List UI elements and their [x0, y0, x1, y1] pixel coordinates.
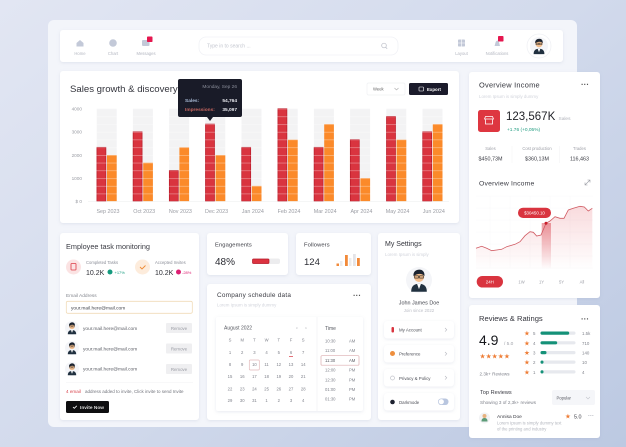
time picker: 01:00: [325, 387, 336, 392]
search box: [199, 37, 398, 55]
rating bars: 1.5k: [582, 331, 591, 336]
background panel: [48, 20, 577, 427]
calendar: W: [265, 338, 269, 342]
calendar: F: [290, 338, 293, 342]
stat: completed tasks: Completed Tasks: [86, 260, 118, 265]
time picker: 11:00: [325, 348, 336, 353]
panel: sales growth chart: [60, 71, 459, 223]
invite row 3: your.mail.here@mail.com: [83, 366, 137, 372]
stat: accepted invites: [135, 260, 192, 277]
invite row 1: your.mail.here@mail.com: [83, 326, 137, 332]
invite row 1: Remove: [171, 326, 188, 331]
panel: followers: Followers: [304, 242, 330, 248]
rating bars: [524, 330, 591, 376]
y axis labels: 3000: [72, 130, 82, 135]
x axis labels: Feb 2024: [278, 209, 300, 215]
top reviews heading: [480, 390, 537, 405]
rating bars: 710: [582, 341, 590, 346]
calendar: 4: [302, 398, 305, 403]
range tabs: 1W: [518, 280, 525, 284]
heading: Company schedule data: [217, 292, 291, 299]
tooltip: Sales:: [185, 98, 200, 104]
panel: reviews and ratings: 2.3k+ Reviews: [480, 372, 510, 376]
calendar: 2: [278, 398, 281, 403]
nav item: chart: [108, 39, 119, 56]
rating bars: 140: [582, 350, 590, 356]
time picker: 11:30: [325, 358, 336, 363]
email field: Email Address: [66, 293, 97, 299]
calendar: 30: [240, 398, 245, 403]
time picker: AM: [349, 338, 356, 343]
rating bars: 4: [533, 341, 536, 346]
panel: company schedule: Lorem Ipsum is simply dummy: [217, 302, 277, 308]
calendar: 29: [228, 398, 233, 403]
stat: completed tasks: +17%: [114, 270, 125, 275]
tooltip: [178, 79, 242, 121]
progress bar: [252, 258, 280, 264]
icon: store: [478, 110, 500, 132]
x axis labels: May 2024: [386, 209, 409, 215]
y axis labels: 4000: [72, 106, 82, 112]
calendar: 2: [241, 350, 244, 355]
export button: [409, 83, 448, 95]
time picker: AM: [349, 358, 356, 363]
time picker: PM: [349, 397, 356, 402]
nav item: chart: Chart: [108, 51, 119, 56]
calendar: 3: [253, 350, 256, 355]
x axis labels: [96, 209, 445, 215]
calendar: 7: [302, 350, 305, 355]
icon: expand: [585, 180, 590, 185]
heading: Employee task monitoring: [66, 242, 150, 251]
calendar: 20: [289, 374, 294, 379]
invite note: 4 email: [66, 389, 81, 394]
calendar: 18: [264, 374, 270, 379]
menu: preference: Preference: [399, 352, 421, 356]
followers value: 124: [304, 257, 320, 268]
review entry: ···: [588, 414, 594, 420]
calendar: M: [240, 338, 244, 342]
search box: Type in to search ...: [207, 44, 251, 50]
menu: privacy: Privacy & Policy: [399, 376, 431, 381]
rating bars: 10: [582, 360, 587, 365]
calendar: 17: [252, 374, 257, 379]
calendar: 23: [240, 386, 245, 391]
invite row 3: Remove: [171, 367, 188, 372]
rating bars: 5: [533, 331, 536, 336]
x axis labels: Oct 2023: [133, 209, 155, 215]
time picker: 01:30: [325, 397, 336, 402]
bar chart: [88, 109, 450, 202]
calendar: S: [229, 338, 232, 342]
menu dots: ···: [353, 291, 361, 300]
x axis labels: Dec 2023: [205, 209, 228, 215]
nav item: home: Home: [74, 51, 86, 56]
top reviews heading: Showing 3 of 2,3k+ reviews: [480, 400, 537, 405]
calendar: August 2022: [224, 326, 252, 332]
nav item: messages: [136, 36, 156, 56]
time picker: PM: [349, 377, 356, 382]
invite button: [66, 401, 109, 413]
top navigation bar: [60, 30, 563, 62]
calendar: 3: [290, 398, 293, 403]
calendar: 12: [276, 362, 282, 367]
rating bars: ★: [524, 339, 530, 347]
line chart: [476, 196, 593, 270]
export button: Export: [427, 87, 441, 92]
nav item: layout: [455, 40, 469, 56]
stats row: 116,463: [570, 156, 589, 162]
review entry: Lorem Ipsum is simply dummy text: [497, 420, 562, 426]
calendar: 24: [252, 386, 257, 391]
subheading: Overview Income: [479, 180, 535, 188]
time picker: PM: [349, 368, 356, 372]
calendar: T: [253, 338, 256, 342]
review entry: [479, 412, 594, 432]
time picker: 12:00: [325, 368, 336, 372]
calendar: 10: [252, 362, 257, 367]
value pill: [518, 208, 551, 218]
tooltip: Impressions:: [185, 107, 215, 113]
nav item: layout: Layout: [455, 51, 469, 56]
stat: completed tasks: [66, 260, 125, 277]
week dropdown: Week: [373, 86, 385, 92]
stat: completed tasks: 10.2K: [86, 270, 105, 277]
calendar: 28: [301, 386, 306, 391]
stats row: Sales: [485, 146, 496, 151]
rating bars: 1: [533, 370, 536, 375]
range tabs: All: [580, 280, 584, 284]
x axis labels: Jun 2024: [423, 209, 445, 215]
heading: My Settings: [385, 241, 422, 248]
nav item: messages: Messages: [136, 51, 156, 56]
x axis labels: Apr 2024: [350, 209, 372, 215]
tooltip: 35,097: [222, 107, 237, 113]
panel: company schedule: [207, 284, 371, 420]
calendar: 26: [276, 386, 282, 391]
chart title: Sales growth & discovery: [70, 84, 178, 95]
rating bars: 4: [582, 370, 585, 375]
profile avatar: [406, 267, 432, 293]
star row: ★★★★★: [480, 352, 510, 360]
calendar: [216, 317, 363, 411]
y axis labels: 2000: [72, 153, 82, 158]
heading: Reviews & Ratings: [479, 314, 543, 323]
stats row: Cost production: [522, 146, 552, 151]
menu: privacy: [384, 369, 454, 386]
x axis labels: Nov 2023: [169, 209, 192, 215]
panel: my settings: [378, 233, 460, 420]
calendar: S: [302, 338, 305, 342]
rating score: 4.9: [479, 332, 499, 348]
rating score: [479, 332, 514, 348]
x axis labels: Sep 2023: [96, 209, 120, 215]
income figure: [506, 111, 571, 133]
calendar: 1: [265, 398, 268, 403]
review entry: Annisa Doe: [497, 414, 522, 420]
review entry: of the printing and industry: [497, 426, 547, 432]
range tabs: 1Y: [539, 280, 544, 284]
email field: [66, 293, 192, 313]
calendar: 22: [228, 386, 233, 391]
calendar: 21: [301, 374, 306, 379]
income figure: Sales: [558, 116, 571, 122]
calendar: 14: [301, 362, 306, 367]
invite row 2: [65, 341, 192, 355]
calendar: ‹: [296, 326, 298, 330]
week dropdown: [367, 83, 405, 95]
tooltip: 54,764: [222, 98, 237, 104]
calendar: 4: [265, 350, 268, 355]
stats row: $360,13M: [525, 156, 549, 162]
y axis labels: [72, 106, 82, 204]
panel: my settings: Lorem Ipsum is simply: [385, 252, 429, 257]
invite row 2: Remove: [171, 346, 188, 352]
time picker: AM: [349, 348, 356, 353]
stat: accepted invites: -28%: [182, 270, 192, 275]
calendar: 1: [229, 350, 232, 355]
rating bars: ★: [524, 368, 530, 376]
calendar: T: [278, 338, 281, 342]
time picker: 10:30: [325, 338, 336, 343]
user avatar: [527, 34, 551, 58]
menu: my account: [384, 321, 454, 338]
y axis labels: $ 0: [75, 199, 82, 204]
calendar: 16: [240, 374, 245, 379]
calendar: 11: [264, 362, 269, 367]
value pill: $30450.10: [524, 211, 545, 216]
nav item: notifications: [486, 36, 508, 56]
panel: reviews and ratings: ···: [581, 314, 589, 324]
menu: my account: My Account: [399, 328, 422, 332]
panel: followers: [296, 233, 371, 275]
review entry: ★: [565, 412, 571, 420]
income figure: +1.76 (+0,05%): [507, 127, 540, 133]
invite note: address added to invite, Click invite to send Invite: [85, 389, 184, 394]
stat: accepted invites: Accepted Invites: [155, 260, 186, 265]
time picker: [321, 326, 359, 402]
stat: accepted invites: 10.2K: [155, 270, 174, 277]
calendar: 6: [290, 350, 293, 355]
stats row: Trades: [573, 146, 586, 151]
rating bars: ★: [524, 349, 530, 357]
calendar: 19: [276, 374, 282, 379]
tooltip: Monday, Sep 26: [202, 84, 237, 90]
top reviews heading: Top Reviews: [480, 390, 512, 396]
calendar: 27: [289, 386, 294, 391]
menu: darkmode toggle: Darkmode: [399, 400, 420, 405]
menu: preference: [384, 345, 454, 362]
x axis labels: Mar 2024: [314, 209, 337, 215]
panel: overview income: Lorem Ipsum is simply dummy: [479, 94, 539, 99]
income figure: 123,567K: [506, 111, 556, 123]
profile name: John James Doe: [399, 300, 439, 306]
calendar: 9: [241, 362, 244, 367]
engagement value: 48%: [215, 257, 235, 268]
time picker: Time: [325, 326, 336, 332]
stats row: $450,73M: [479, 156, 503, 162]
rating bars: ★: [524, 358, 530, 366]
nav item: home: [74, 40, 86, 56]
range tabs: [477, 276, 584, 288]
calendar: 8: [229, 362, 232, 367]
calendar: 5: [278, 350, 281, 355]
rating bars: 2: [533, 360, 536, 365]
invite button: Invite Now: [80, 405, 104, 411]
calendar: ›: [305, 326, 307, 330]
time picker: PM: [349, 387, 356, 392]
panel: engagements: Engagements: [215, 242, 252, 248]
rating score: / 5.0: [504, 341, 514, 347]
rating bars: ★: [524, 330, 530, 338]
time picker: 12:30: [325, 377, 336, 382]
panel: my settings: Join since 2022: [404, 308, 435, 313]
calendar: 15: [228, 374, 233, 379]
y axis labels: 1000: [72, 176, 82, 181]
email field: your.mail.here@mail.com: [71, 306, 125, 312]
panel: overview income: [469, 72, 600, 298]
stats row: [479, 146, 589, 163]
panel: reviews and ratings: [469, 305, 600, 438]
x axis labels: Jan 2024: [242, 209, 264, 215]
popular dropdown: Popular: [556, 396, 572, 400]
range tabs: 5Y: [559, 280, 564, 284]
panel: engagements: [207, 233, 288, 275]
calendar: 25: [264, 386, 270, 391]
heading: Overview Income: [479, 80, 540, 90]
range tabs: 24H: [486, 280, 494, 284]
panel: employee task monitoring: [60, 233, 199, 420]
calendar: 31: [252, 398, 257, 403]
review entry: 5.0: [574, 414, 582, 420]
calendar: 13: [289, 362, 294, 367]
invite row 1: [65, 321, 192, 335]
panel: overview income: ···: [581, 80, 589, 89]
mini bar chart: [336, 254, 360, 266]
nav item: notifications: Notifications: [486, 51, 508, 56]
rating bars: 3: [533, 350, 536, 356]
menu: darkmode toggle: [384, 393, 454, 410]
invite row 3: [65, 362, 192, 376]
invite row 2: your.mail.here@mail.com: [83, 346, 137, 352]
